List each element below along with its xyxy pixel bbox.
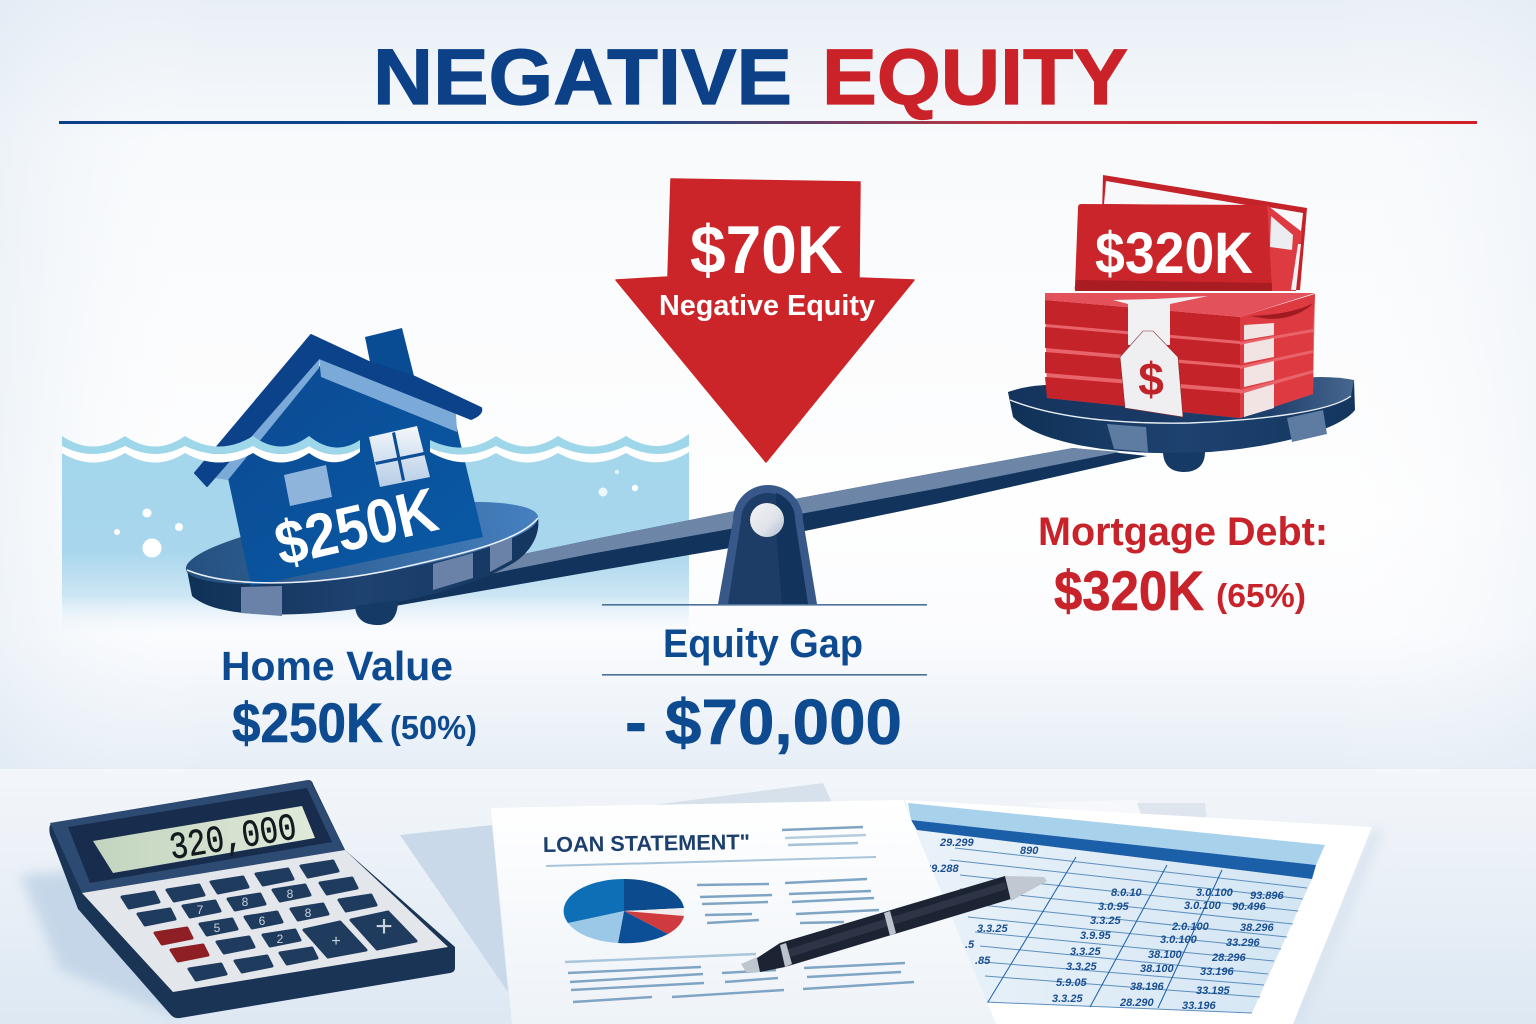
table figures: 8.0.10 — [1111, 887, 1142, 899]
table figures: 89.288 — [925, 863, 960, 875]
table figures: 38.100 — [1140, 963, 1175, 975]
key face — [82, 850, 448, 992]
strap — [1113, 296, 1208, 345]
table figures: 3.3.25 — [1066, 961, 1097, 973]
lcd — [93, 806, 315, 873]
key labels: + — [331, 933, 341, 950]
pie chart — [564, 879, 684, 943]
table figures: 33.196 — [1200, 966, 1235, 978]
roof — [195, 335, 481, 486]
key labels: 8 — [305, 906, 312, 920]
table figures: .5 — [965, 939, 975, 951]
table figures: 3.3.25 — [1070, 946, 1101, 958]
red arrow callout: $70K — [690, 212, 843, 288]
icon: price tag — [1120, 331, 1183, 417]
small window — [284, 465, 332, 506]
red arrow callout — [616, 179, 914, 462]
icon: calculator — [49, 780, 455, 1018]
red arrow callout: Negative Equity — [659, 290, 875, 322]
display digits: 320,000 — [167, 807, 300, 871]
table light header — [908, 803, 1325, 865]
table figures: 3.3.25 — [1090, 915, 1121, 927]
water surface waves — [62, 434, 689, 462]
table figures: 38.296 — [1240, 922, 1275, 934]
table figures: .85 — [975, 955, 991, 967]
top surface — [1045, 293, 1315, 317]
label: home value — [221, 643, 477, 754]
table figures: 5.9.05 — [1056, 977, 1087, 989]
table surface — [0, 769, 1536, 1024]
label: home value: (50%) — [390, 709, 477, 746]
table figures: 33.296 — [1226, 937, 1261, 949]
panel: loan statement document — [491, 800, 996, 1024]
calculator shadow — [20, 868, 180, 1018]
key labels: 7 — [197, 903, 204, 917]
table grid — [950, 848, 1307, 1013]
house body — [228, 366, 483, 586]
scale plate: left — [181, 485, 543, 625]
table figures — [925, 837, 1285, 1012]
stack backing — [1045, 294, 1315, 418]
icon: sinking house — [195, 328, 483, 586]
table cells — [917, 830, 1312, 1013]
table figures: 3.0.95 — [1098, 901, 1129, 913]
house value: $250K — [269, 475, 444, 580]
label: equity gap: Equity Gap — [663, 622, 863, 666]
display bezel — [68, 788, 332, 883]
heading rule — [546, 857, 876, 866]
statement text lines — [565, 827, 914, 1002]
panel: flood water — [62, 450, 689, 632]
table figures: 2.0.100 — [1171, 921, 1210, 933]
table figures: 3.9.95 — [1080, 930, 1111, 942]
label: equity gap — [602, 604, 927, 758]
label: home value: Home Value — [221, 643, 453, 689]
table figures: 33.195 — [1196, 985, 1231, 997]
key labels — [197, 887, 393, 950]
table figures: 38.196 — [1130, 981, 1165, 993]
title: NEGATIVE — [373, 32, 792, 121]
chimney — [365, 328, 415, 380]
table figures: 3.0.100 — [1196, 887, 1234, 899]
layer fronts — [1045, 300, 1240, 418]
large window — [369, 426, 430, 487]
body — [49, 780, 455, 1018]
table figures: 890 — [1020, 845, 1039, 857]
title — [373, 32, 1128, 121]
plate peg — [355, 600, 398, 625]
key labels: 5 — [214, 921, 221, 935]
table figures: 3.0.100 — [1160, 934, 1198, 946]
seesaw beam — [395, 448, 1147, 606]
title underline — [59, 121, 1477, 124]
pivot — [750, 503, 784, 537]
icon: stack of debt money — [1045, 293, 1315, 418]
table figures: 38.100 — [1148, 949, 1183, 961]
table figures: 93.896 — [1250, 890, 1285, 902]
key labels: 8 — [242, 895, 249, 909]
plate rim highlight and stripes — [187, 518, 538, 616]
bubbles — [114, 470, 638, 558]
label: mortgage debt: $320K — [1054, 559, 1204, 622]
label: equity gap: - $70,000 — [625, 686, 902, 758]
table figures: 90.496 — [1232, 901, 1267, 913]
scale plate: right — [1008, 377, 1355, 472]
loan statement heading: LOAN STATEMENT" — [543, 830, 750, 857]
key labels: 2 — [277, 932, 284, 946]
key labels: 8 — [287, 887, 294, 901]
upper panel — [50, 780, 345, 893]
seesaw fulcrum — [718, 485, 817, 604]
label: home value: $250K — [232, 691, 383, 754]
table figures: 28.290 — [1119, 997, 1155, 1009]
label: mortgage debt — [1038, 510, 1328, 622]
layer side panels — [1240, 294, 1315, 418]
icon: pen — [741, 876, 1047, 972]
table figures: 29.299 — [939, 837, 975, 849]
title: EQUITY — [822, 32, 1128, 121]
icon: price tag: $ — [1138, 353, 1164, 405]
table figures: 33.196 — [1182, 1000, 1217, 1012]
keys — [122, 861, 416, 980]
table figures: 3.0.100 — [1184, 900, 1222, 912]
table figures: 3.3.25 — [1052, 993, 1083, 1005]
key labels: + — [375, 910, 393, 943]
key labels: 6 — [259, 914, 266, 928]
folder amount: $320K — [1095, 221, 1253, 286]
table dark header — [911, 820, 1316, 879]
plate peg — [1163, 452, 1205, 472]
icon: debt folder — [1075, 175, 1307, 291]
back sheets — [400, 783, 1207, 992]
table figures: 3.3.25 — [977, 923, 1008, 935]
label: mortgage debt: (65%) — [1216, 577, 1306, 614]
table figures: 28.296 — [1211, 952, 1247, 964]
panel: table document — [905, 800, 1382, 1024]
label: mortgage debt: Mortgage Debt: — [1038, 510, 1328, 554]
